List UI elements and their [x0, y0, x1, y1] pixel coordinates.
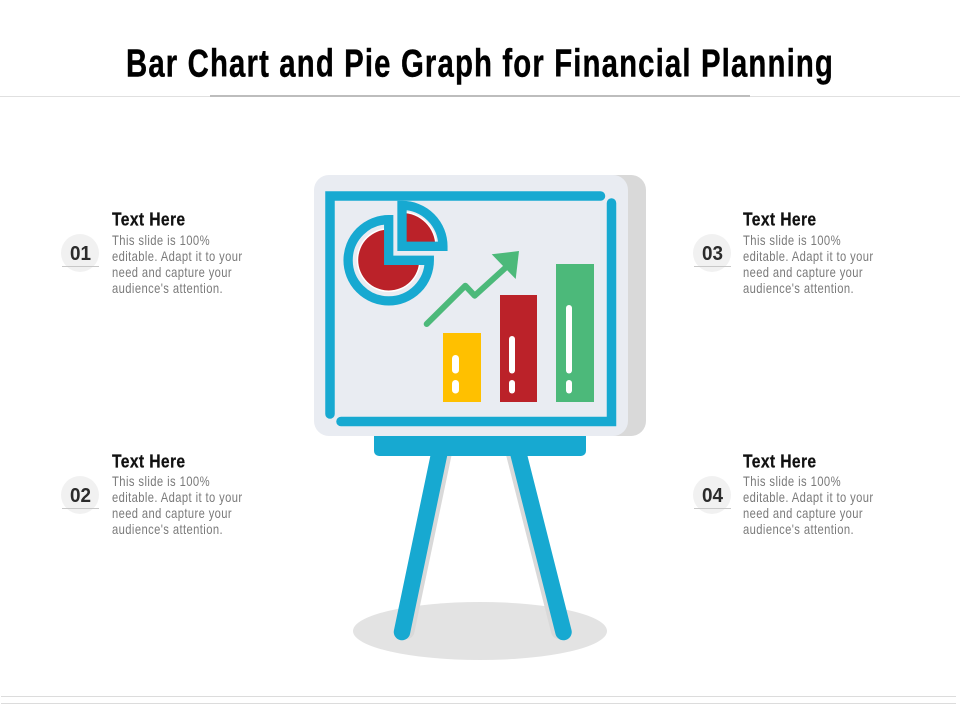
growth arrow	[427, 251, 519, 324]
pie chart large	[348, 220, 429, 301]
bar: red	[500, 295, 537, 402]
bar: green	[556, 264, 594, 402]
heading 03: Text Here	[743, 210, 816, 230]
easel leg shadows	[406, 450, 559, 631]
number badge 01	[61, 234, 99, 272]
body text 01: need and capture your	[112, 264, 232, 280]
bar: yellow	[443, 333, 481, 402]
number badge 04: 04	[702, 485, 724, 507]
easel illustration	[314, 175, 646, 660]
number badge 03	[693, 234, 731, 272]
number badge 01: 01	[70, 243, 91, 265]
heading 02: Text Here	[112, 452, 186, 472]
body text 03	[743, 232, 874, 296]
body text 02	[112, 473, 242, 537]
callout 01	[61, 210, 242, 296]
body text 03: editable. Adapt it to your	[743, 248, 874, 264]
callout 04	[693, 452, 874, 537]
body text 01: audience's attention.	[112, 280, 223, 296]
body text 02: audience's attention.	[112, 521, 223, 537]
body text 01: editable. Adapt it to your	[112, 248, 242, 264]
number badge 04	[693, 476, 731, 514]
body text 04: editable. Adapt it to your	[743, 489, 874, 505]
body text 04: need and capture your	[743, 505, 863, 521]
body text 01	[112, 232, 242, 296]
board front	[314, 175, 628, 436]
board frame	[330, 196, 612, 422]
body text 04: This slide is 100%	[743, 473, 841, 489]
body text 02: editable. Adapt it to your	[112, 489, 242, 505]
body text 03: audience's attention.	[743, 280, 854, 296]
body text 04	[743, 473, 874, 537]
number badge 02	[61, 476, 99, 514]
easel crossbar	[374, 434, 586, 456]
body text 01: This slide is 100%	[112, 232, 210, 248]
floor shadow	[353, 602, 607, 660]
number badge 02: 02	[70, 485, 91, 507]
callout 02	[61, 452, 242, 537]
heading 01: Text Here	[112, 210, 186, 230]
easel legs	[402, 450, 564, 632]
body text 03: need and capture your	[743, 264, 863, 280]
body text 04: audience's attention.	[743, 521, 854, 537]
callout 03	[693, 210, 874, 296]
heading 04: Text Here	[743, 452, 816, 472]
board back	[330, 175, 646, 436]
pie chart slice	[402, 205, 443, 246]
body text 03: This slide is 100%	[743, 232, 841, 248]
body text 02: need and capture your	[112, 505, 232, 521]
body text 02: This slide is 100%	[112, 473, 210, 489]
number badge 03: 03	[702, 243, 723, 265]
